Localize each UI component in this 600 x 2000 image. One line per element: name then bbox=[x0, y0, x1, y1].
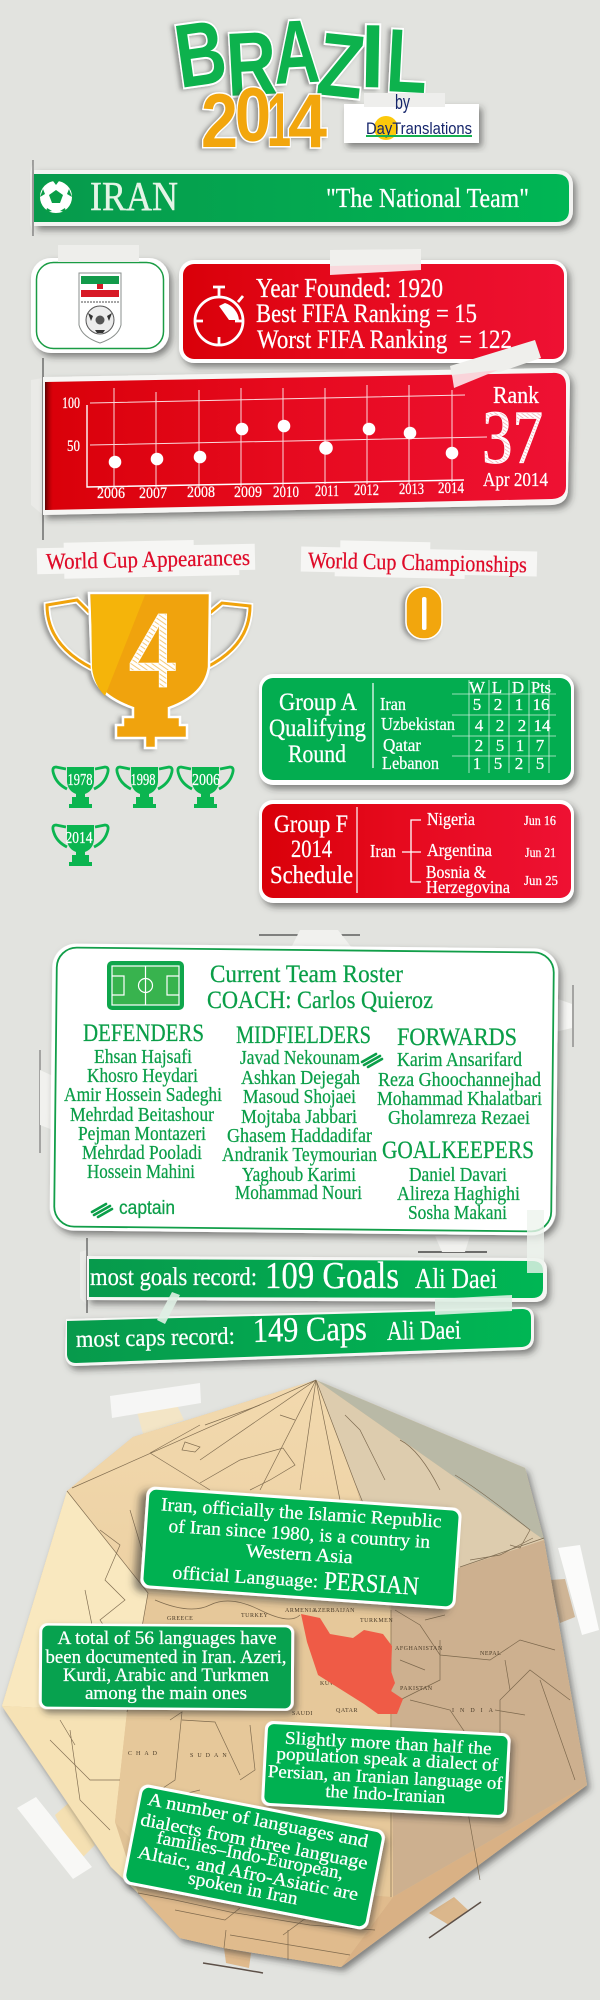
axis labels: 2013 bbox=[399, 481, 424, 498]
panel: year founded and FIFA rankings bbox=[179, 249, 567, 363]
text: current rank bbox=[482, 383, 548, 491]
trophy: 2014 bbox=[53, 825, 108, 866]
table: group standings: 5 bbox=[496, 736, 504, 755]
heading: Current Team Roster: Current Team Roster bbox=[210, 961, 404, 988]
panel: most caps record bbox=[65, 1292, 534, 1366]
trophy cup bbox=[89, 593, 210, 748]
schedule bracket: Iran bbox=[370, 841, 396, 861]
list: defenders: Khosro Heydari bbox=[87, 1065, 198, 1087]
icon: soccer ball bbox=[40, 180, 72, 214]
map borders and coastlines bbox=[50, 1380, 575, 1960]
list: midfielders: Mojtaba Jabbari bbox=[241, 1106, 357, 1128]
map country labels: INDIA bbox=[452, 1708, 499, 1714]
callout: Iran official language bbox=[140, 1486, 462, 1610]
list: defenders: DEFENDERS bbox=[83, 1020, 204, 1047]
list: defenders: Ehsan Hajsafi bbox=[94, 1046, 192, 1068]
axis labels: 2007 bbox=[139, 485, 167, 502]
table: group standings: 2 bbox=[475, 736, 483, 755]
table: group standings: 1 bbox=[473, 754, 481, 773]
trophy: 1978: 1978 bbox=[68, 770, 92, 789]
title word: BRAZIL: R bbox=[224, 13, 279, 116]
panel: Group A qualifying round bbox=[259, 674, 574, 785]
list: goalkeepers: Daniel Davari bbox=[409, 1164, 507, 1186]
panel: Group F 2014 schedule bbox=[259, 800, 574, 903]
callout: Persian dialect bbox=[261, 1721, 511, 1818]
title word: BRAZIL: L bbox=[384, 11, 430, 113]
logo: by DayTranslations bbox=[344, 92, 479, 143]
callout: Persian dialect: the Indo-Iranian bbox=[325, 1781, 446, 1807]
list: defenders: Hossein Mahini bbox=[87, 1161, 195, 1183]
text: most caps record: most caps record: bbox=[76, 1324, 235, 1353]
map country labels: TURKMEN bbox=[360, 1618, 393, 1624]
table: group standings: 5 bbox=[536, 754, 544, 773]
heading: World Cup Championships: World Cup Championships bbox=[308, 548, 527, 577]
heading: Group A Qualifying Round: Qualifying bbox=[269, 715, 366, 742]
callout: Iran official language: Western Asia bbox=[245, 1541, 354, 1568]
list: goalkeepers bbox=[382, 1137, 534, 1224]
schedule bracket: Bosnia & bbox=[426, 862, 486, 882]
map country labels: AFGHANISTAN bbox=[395, 1646, 443, 1652]
title: Brazil 2014 bbox=[169, 2, 430, 164]
table: group standings: Uzbekistan bbox=[381, 714, 455, 734]
trophy: 2014: 2014 bbox=[66, 828, 93, 847]
heading: Group A Qualifying Round bbox=[269, 689, 366, 768]
heading: Group F 2014 Schedule: 2014 bbox=[291, 836, 332, 863]
panel: FIFA rank chart bbox=[31, 340, 570, 540]
logo: by DayTranslations: by bbox=[395, 92, 410, 114]
list: defenders: Amir Hossein Sadeghi bbox=[64, 1084, 222, 1106]
map country labels: PAKISTAN bbox=[400, 1686, 433, 1692]
panel: team crest card bbox=[31, 245, 169, 353]
icon: gold trophy with appearances count bbox=[47, 592, 250, 748]
list: midfielders: MIDFIELDERS bbox=[236, 1022, 371, 1049]
callout: languages documented bbox=[39, 1623, 294, 1711]
icon: captain armband on Nekounam bbox=[362, 1054, 382, 1067]
heading: IRAN: IRAN bbox=[90, 173, 178, 219]
list: goalkeepers: Alireza Haghighi bbox=[397, 1183, 520, 1205]
table: group standings: W bbox=[469, 678, 486, 697]
map faces bbox=[2, 1380, 587, 1967]
table: group standings: 1 bbox=[516, 736, 524, 755]
heading: Group F 2014 Schedule bbox=[270, 811, 353, 889]
map country labels: SUDAN bbox=[190, 1753, 231, 1759]
number: four appearances: 4 bbox=[128, 592, 178, 710]
title word: BRAZIL bbox=[169, 2, 430, 119]
axis labels: 2008 bbox=[187, 484, 215, 501]
icon: stopwatch bbox=[195, 287, 243, 345]
trophy handles bbox=[47, 600, 250, 668]
table: group standings: 2 bbox=[518, 716, 526, 735]
axis labels: 2012 bbox=[354, 482, 379, 499]
trophy: 1978 bbox=[53, 767, 108, 808]
logo: by DayTranslations: DayTranslations bbox=[366, 119, 472, 138]
callout: Persian dialect: Slightly more than half the bbox=[284, 1728, 492, 1758]
map country labels: ARMENIA bbox=[285, 1608, 317, 1614]
list: forwards: Karim Ansarifard bbox=[397, 1049, 522, 1071]
table: group standings: L bbox=[492, 678, 502, 697]
list: defenders: Mehrdad Pooladi bbox=[82, 1142, 202, 1164]
title word: 2014 bbox=[201, 73, 327, 164]
axis labels: 2014 bbox=[438, 480, 464, 497]
tape bbox=[527, 1210, 544, 1273]
list: midfielders: Masoud Shojaei bbox=[243, 1086, 356, 1108]
table: group standings: 4 bbox=[475, 716, 484, 735]
callout: languages documented: A total of 56 languages have bbox=[58, 1629, 276, 1649]
title word: BRAZIL: B bbox=[169, 2, 232, 108]
schedule bracket: Jun 16 bbox=[524, 814, 556, 829]
map highlight: Iran bbox=[301, 1614, 403, 1714]
text: current rank: Rank bbox=[493, 383, 539, 409]
callout: Iran official language: official Language: bbox=[172, 1563, 319, 1592]
table: group standings: 16 bbox=[532, 695, 550, 714]
number: 109 Goals: 109 Goals bbox=[265, 1255, 399, 1297]
schedule bracket: Argentina bbox=[427, 840, 492, 860]
text: current rank: 37 bbox=[482, 396, 543, 480]
schedule bracket: Herzegovina bbox=[426, 877, 510, 897]
list: defenders: Pejman Montazeri bbox=[78, 1123, 206, 1145]
list: midfielders: Yaghoub Karimi bbox=[242, 1164, 356, 1186]
number: 149 Caps: 149 Caps bbox=[252, 1309, 367, 1350]
callout: Iran official language: PERSIAN bbox=[323, 1566, 420, 1601]
map country labels: CHAD bbox=[128, 1751, 161, 1757]
callout: language families: Altaic, and Afro-Asiatic are bbox=[136, 1843, 360, 1905]
list: midfielders: Mohammad Nouri bbox=[235, 1182, 362, 1204]
paper tabs and tape bbox=[17, 1383, 599, 1973]
panel: current team roster bbox=[40, 930, 573, 1252]
schedule bracket: Nigeria bbox=[427, 809, 475, 829]
list: goalkeepers: Sosha Makani bbox=[408, 1202, 507, 1224]
number: zero championships bbox=[406, 587, 442, 639]
table: group standings: Lebanon bbox=[382, 753, 439, 773]
text: most goals record: most goals record: bbox=[90, 1264, 257, 1291]
callout: language families: A number of languages and bbox=[146, 1790, 371, 1852]
title word: 2014: 0 bbox=[235, 73, 271, 158]
list: forwards: Gholamreza Rezaei bbox=[388, 1107, 530, 1129]
text: Ali Daei: Ali Daei bbox=[415, 1264, 497, 1295]
icon: Iran federation crest bbox=[79, 273, 121, 343]
icon: soccer pitch bbox=[107, 961, 184, 1010]
table: group standings: 2 bbox=[496, 716, 504, 735]
list: forwards: Reza Ghoochannejhad bbox=[378, 1069, 541, 1091]
legend: captain bbox=[92, 1198, 175, 1219]
text: best FIFA ranking: Best FIFA Ranking = 15 bbox=[256, 299, 477, 328]
tape bbox=[330, 249, 421, 268]
map polyhedron bbox=[2, 1380, 599, 1973]
heading: Group F 2014 Schedule: Schedule bbox=[270, 862, 353, 889]
trophy: 2006: 2006 bbox=[192, 770, 220, 789]
panel: most goals record bbox=[80, 1210, 547, 1313]
heading: Group A Qualifying Round: Round bbox=[288, 741, 346, 768]
list: midfielders bbox=[222, 1022, 377, 1204]
trophy: 1998 bbox=[117, 767, 172, 808]
title word: BRAZIL: A bbox=[271, 2, 322, 104]
list: midfielders: Ashkan Dejegah bbox=[241, 1067, 360, 1089]
tape bbox=[435, 1295, 512, 1315]
tape bbox=[157, 1292, 180, 1324]
title word: BRAZIL: I bbox=[360, 7, 385, 107]
table: group standings: 1 bbox=[515, 695, 523, 714]
map country labels: TURKEY bbox=[241, 1613, 268, 1619]
callout: language families bbox=[122, 1783, 386, 1931]
text: Ali Daei: Ali Daei bbox=[386, 1314, 461, 1346]
table: group standings bbox=[380, 678, 556, 773]
axis labels: 100 bbox=[62, 395, 80, 412]
text: current rank: Apr 2014 bbox=[483, 469, 548, 491]
title word: 2014: 4 bbox=[288, 79, 327, 164]
callout: Iran official language: of Iran since 1980, is a country in bbox=[168, 1516, 431, 1553]
banner: Iran The National Team bbox=[30, 160, 573, 236]
tape bbox=[450, 340, 541, 376]
schedule bracket: Jun 21 bbox=[525, 846, 556, 861]
map country labels: KUWAIT bbox=[320, 1681, 347, 1687]
table: group standings: 5 bbox=[473, 695, 481, 714]
axis labels: 2009 bbox=[234, 484, 262, 501]
table: group standings: 2 bbox=[494, 695, 502, 714]
axis labels: 2006 bbox=[97, 485, 125, 502]
axis labels: 2011 bbox=[315, 483, 339, 500]
data points bbox=[109, 420, 458, 468]
table: group standings: Iran bbox=[380, 694, 406, 714]
table: group standings: D bbox=[512, 678, 524, 697]
map country labels: SAUDI bbox=[292, 1711, 313, 1717]
axis labels: 2010 bbox=[273, 484, 299, 501]
trophy: 2006 bbox=[178, 767, 233, 808]
map country labels bbox=[128, 1608, 501, 1759]
table: group standings: 7 bbox=[536, 736, 545, 755]
callout: languages documented: been documented in Iran. Azeri, bbox=[46, 1648, 286, 1668]
line chart: rank by year bbox=[62, 385, 487, 502]
legend: captain: captain bbox=[119, 1198, 175, 1219]
callout: languages documented: among the main ones bbox=[85, 1684, 247, 1704]
title word: 2014: 2 bbox=[201, 79, 238, 164]
list: midfielders: Ghasem Haddadifar bbox=[227, 1125, 372, 1147]
map country labels: NEPAL bbox=[480, 1651, 501, 1657]
heading: World Cup Championships bbox=[301, 540, 537, 580]
list: forwards: Mohammad Khalatbari bbox=[377, 1088, 542, 1110]
callout: Persian dialect: population speak a dialect of bbox=[276, 1743, 499, 1775]
heading: Group F 2014 Schedule: Group F bbox=[274, 811, 348, 838]
schedule bracket: Jun 25 bbox=[524, 874, 558, 889]
title word: BRAZIL: Z bbox=[313, 14, 369, 119]
list: goalkeepers: GOALKEEPERS bbox=[382, 1137, 534, 1164]
heading: World Cup Appearances: World Cup Appearances bbox=[46, 545, 250, 574]
callout: language families: families–Indo-European, bbox=[155, 1828, 345, 1884]
table: group standings: Qatar bbox=[383, 735, 421, 755]
table: group standings: 2 bbox=[515, 754, 523, 773]
text: worst FIFA ranking: Worst FIFA Ranking = 122 bbox=[257, 325, 512, 354]
map country labels: QATAR bbox=[336, 1708, 358, 1714]
list: defenders: Mehrdad Beitashour bbox=[70, 1104, 214, 1126]
heading: World Cup Appearances bbox=[37, 539, 255, 579]
list: midfielders: Andranik Teymourian bbox=[222, 1144, 377, 1166]
heading: coach: COACH: Carlos Quieroz bbox=[207, 987, 433, 1014]
map country labels: AZERBAIJAN bbox=[313, 1608, 355, 1614]
schedule bracket bbox=[370, 809, 558, 897]
table: group standings: 5 bbox=[494, 754, 502, 773]
callout: Iran official language: Iran, officially the Islamic Republic bbox=[160, 1494, 442, 1533]
table: group standings: 14 bbox=[534, 716, 551, 735]
list: defenders bbox=[64, 1020, 222, 1183]
axis labels bbox=[62, 395, 464, 502]
map country labels: GREECE bbox=[167, 1616, 193, 1622]
list: forwards bbox=[377, 1024, 542, 1129]
callout: Persian dialect: Persian, an Iranian language of bbox=[267, 1761, 503, 1793]
heading: Group A Qualifying Round: Group A bbox=[279, 689, 357, 716]
axis labels: 50 bbox=[67, 438, 80, 455]
callout: language families: spoken in Iran bbox=[187, 1869, 299, 1909]
subheading: The National Team: "The National Team" bbox=[326, 183, 529, 213]
title word: 2014: 1 bbox=[267, 78, 291, 163]
list: midfielders: Javad Nekounam bbox=[240, 1047, 360, 1069]
table: group standings: Pts bbox=[531, 678, 551, 697]
callout: languages documented: Kurdi, Arabic and Turkmen bbox=[63, 1666, 269, 1686]
callout: language families: dialects from three language bbox=[139, 1810, 369, 1874]
list: forwards: FORWARDS bbox=[397, 1024, 517, 1051]
text: year founded: Year Founded: 1920 bbox=[256, 273, 443, 303]
trophy: 1998: 1998 bbox=[130, 770, 156, 789]
